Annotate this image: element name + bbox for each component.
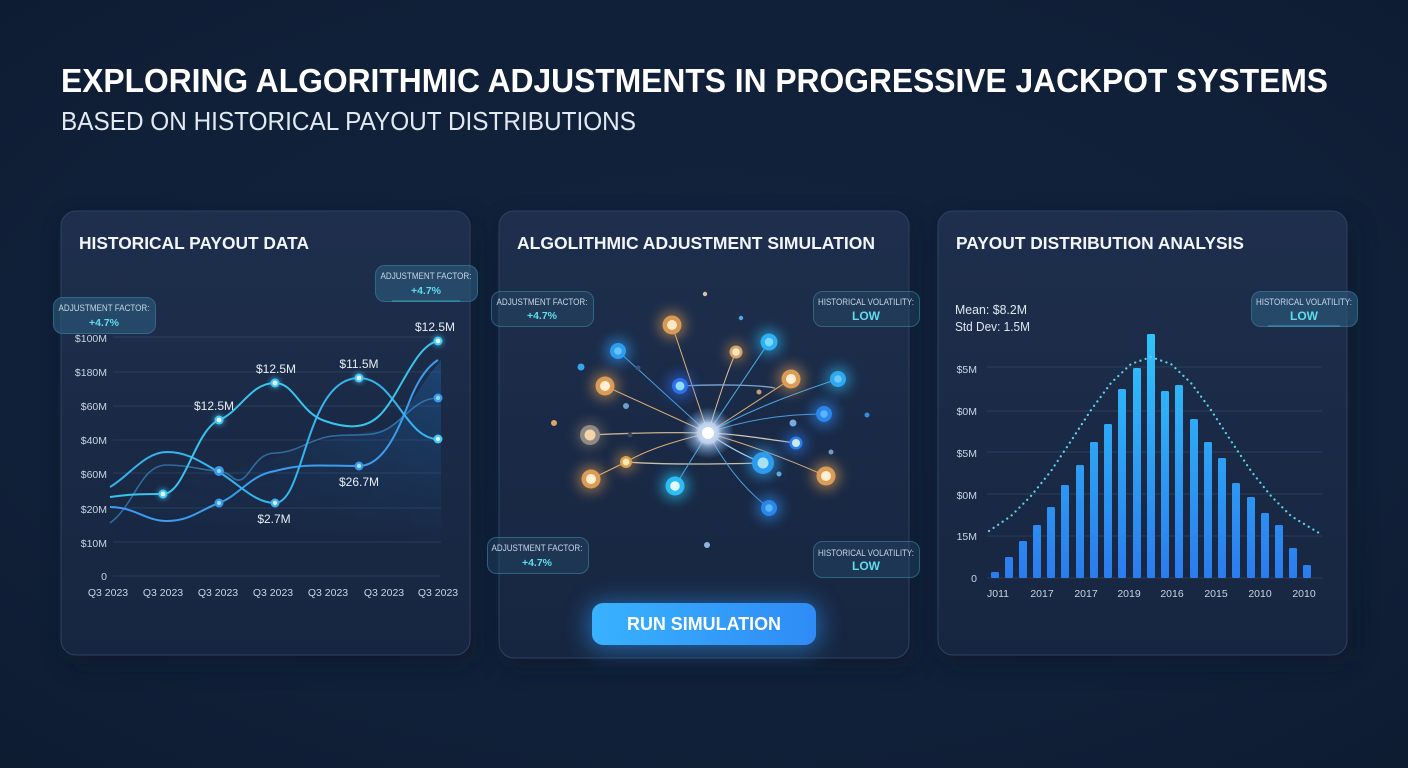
line series: faint blue xyxy=(110,398,438,523)
panel: payout distribution analysis xyxy=(938,211,1358,664)
blue nodes xyxy=(605,329,851,521)
histogram y axis labels: $5M xyxy=(957,448,977,460)
chart x axis labels: Q3 2023 xyxy=(253,587,293,599)
line series: cyan peak and fall xyxy=(110,378,438,503)
heading: payout distribution analysis: PAYOUT DISTRIBUTION ANALYSIS xyxy=(956,233,1244,253)
dotted distribution curve xyxy=(989,357,1319,533)
histogram y axis labels: $0M xyxy=(957,406,977,418)
callout: adjustment factor, left: +4.7% xyxy=(89,317,120,329)
callout: adjustment factor, bottom left: +4.7% xyxy=(522,557,553,569)
chart x axis labels: Q3 2023 xyxy=(143,587,183,599)
histogram y axis labels xyxy=(957,364,977,585)
chart x axis labels: Q3 2023 xyxy=(308,587,348,599)
chart y axis labels: $10M xyxy=(81,538,107,550)
histogram x axis labels: 2017 xyxy=(1030,588,1054,600)
callout: adjustment factor, top left: +4.7% xyxy=(527,310,558,322)
data value labels xyxy=(194,320,455,526)
heading: historical payout data: HISTORICAL PAYOUT DATA xyxy=(79,233,309,253)
summary statistics: Mean: $8.2M xyxy=(955,302,1027,317)
panel: algorithmic adjustment simulation xyxy=(488,211,920,667)
callout: adjustment factor, left: ADJUSTMENT FACTOR: xyxy=(58,303,150,313)
central hub node xyxy=(682,407,734,459)
network diagram xyxy=(551,292,870,548)
data value labels: $12.5M xyxy=(415,320,455,334)
histogram x axis labels: 2010 xyxy=(1292,588,1316,600)
summary statistics xyxy=(955,302,1030,334)
button: run simulation: RUN SIMULATION xyxy=(627,614,781,634)
histogram y axis labels: 15M xyxy=(957,531,977,543)
chart y axis labels: $20M xyxy=(81,504,107,516)
callout: adjustment factor, bottom left: ADJUSTMENT FACTOR: xyxy=(492,543,582,553)
callout: adjustment factor, right: +4.7% xyxy=(411,285,442,297)
line series: blue xyxy=(110,360,438,521)
callout: historical volatility, top right: HISTORICAL VOLATILITY: xyxy=(818,297,914,307)
network small dots xyxy=(551,292,870,548)
callout: historical volatility, bottom right: HISTORICAL VOLATILITY: xyxy=(818,548,914,558)
chart y axis labels: $100M xyxy=(75,333,107,345)
histogram x axis labels xyxy=(987,588,1316,600)
data value labels: $2.7M xyxy=(257,512,291,526)
data point markers xyxy=(157,335,444,508)
histogram x axis labels: 2017 xyxy=(1074,588,1098,600)
chart y axis labels: $60M xyxy=(81,401,107,413)
chart y axis labels: $40M xyxy=(81,435,107,447)
callout: historical volatility xyxy=(1252,292,1358,326)
callout: adjustment factor, top left: ADJUSTMENT FACTOR: xyxy=(496,297,588,307)
histogram x axis labels: 2019 xyxy=(1117,588,1141,600)
subtitle: BASED ON HISTORICAL PAYOUT DISTRIBUTIONS xyxy=(61,106,636,136)
area fill under lines xyxy=(286,360,441,514)
chart x axis labels: Q3 2023 xyxy=(418,587,458,599)
histogram bars xyxy=(991,334,1311,578)
heading: algolithmic adjustment simulation: ALGOLITHMIC ADJUSTMENT SIMULATION xyxy=(517,233,875,253)
button: run simulation xyxy=(588,602,820,650)
chart x axis labels: Q3 2023 xyxy=(364,587,404,599)
panel: historical payout data xyxy=(54,211,478,664)
histogram chart xyxy=(957,334,1322,600)
line series: bright cyan xyxy=(110,341,438,497)
histogram x axis labels: 2015 xyxy=(1204,588,1228,600)
chart y axis labels: 0 xyxy=(101,571,107,583)
callout: historical volatility, top right xyxy=(814,292,920,326)
callout: historical volatility: LOW xyxy=(1290,309,1319,323)
histogram x axis labels: 2010 xyxy=(1248,588,1272,600)
callout: historical volatility, top right: LOW xyxy=(852,309,881,323)
histogram x axis labels: J011 xyxy=(987,588,1009,600)
line chart: payouts by quarter xyxy=(75,320,458,599)
chart x axis labels xyxy=(88,587,458,599)
chart x axis labels: Q3 2023 xyxy=(88,587,128,599)
network connecting lines xyxy=(590,325,838,508)
chart y axis labels: $60M xyxy=(81,469,107,481)
callout: historical volatility, bottom right: LOW xyxy=(852,559,881,573)
data value labels: $26.7M xyxy=(339,475,379,489)
chart x axis labels: Q3 2023 xyxy=(198,587,238,599)
data value labels: $12.5M xyxy=(256,362,296,376)
orange nodes xyxy=(577,311,840,493)
title: EXPLORING ALGORITHMIC ADJUSTMENTS IN PROGRESSIVE JACKPOT SYSTEMS xyxy=(61,63,1328,100)
histogram y axis labels: $0M xyxy=(957,490,977,502)
chart y axis labels: $180M xyxy=(75,367,107,379)
callout: adjustment factor, right xyxy=(376,266,478,302)
callout: adjustment factor, bottom left xyxy=(488,538,588,574)
histogram x axis labels: 2016 xyxy=(1160,588,1184,600)
callout: adjustment factor, top left xyxy=(492,292,594,326)
data value labels: $11.5M xyxy=(339,357,379,371)
callout: historical volatility: HISTORICAL VOLATILITY: xyxy=(1256,297,1352,307)
data value labels: $12.5M xyxy=(194,399,234,413)
callout: historical volatility, bottom right xyxy=(814,542,920,578)
summary statistics: Std Dev: 1.5M xyxy=(955,319,1030,334)
callout: adjustment factor, left xyxy=(54,298,156,334)
histogram y axis labels: $5M xyxy=(957,364,977,376)
histogram y axis labels: 0 xyxy=(971,573,977,585)
callout: adjustment factor, right: ADJUSTMENT FACTOR: xyxy=(380,271,472,281)
chart y axis labels xyxy=(75,333,107,583)
